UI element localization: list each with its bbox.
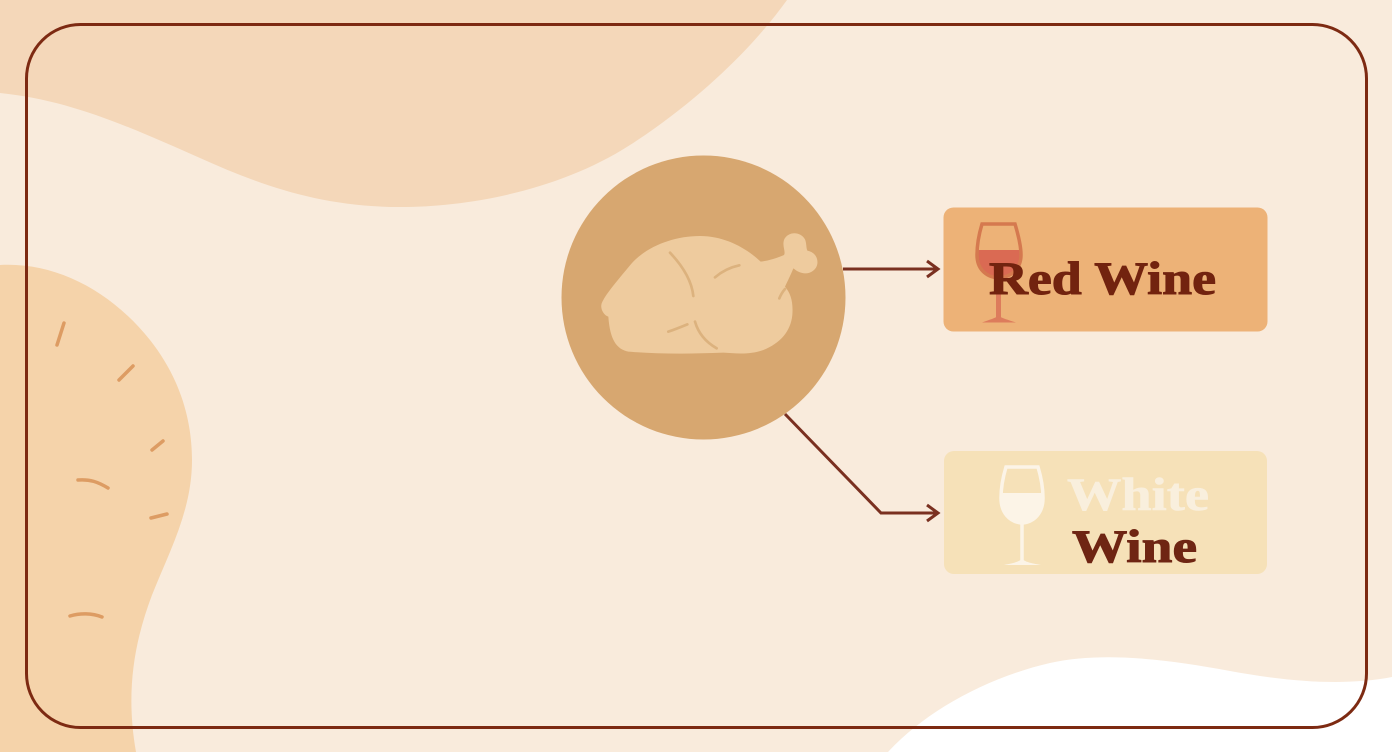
label: White: White: [1067, 469, 1209, 521]
circle: [562, 156, 846, 440]
blob tick marks: [57, 323, 167, 617]
turkey icon circle: [562, 156, 846, 440]
icon: roast turkey: [601, 233, 817, 354]
bottom right white blob: [888, 657, 1392, 752]
card background: [944, 451, 1267, 574]
left background blob: [0, 265, 192, 752]
label: Wine: Wine: [1072, 521, 1197, 573]
card background: [944, 208, 1268, 332]
red wine card: [944, 208, 1268, 332]
connector arrow to white wine: [785, 414, 938, 521]
connector arrow to red wine: [843, 261, 938, 277]
icon: red wine glass: [977, 224, 1021, 322]
turkey crease lines: [668, 253, 785, 348]
icon: white wine glass: [1001, 467, 1043, 565]
top left background blob: [0, 0, 787, 207]
white wine card: [944, 451, 1267, 574]
label: Red Wine: Red Wine: [989, 253, 1216, 305]
